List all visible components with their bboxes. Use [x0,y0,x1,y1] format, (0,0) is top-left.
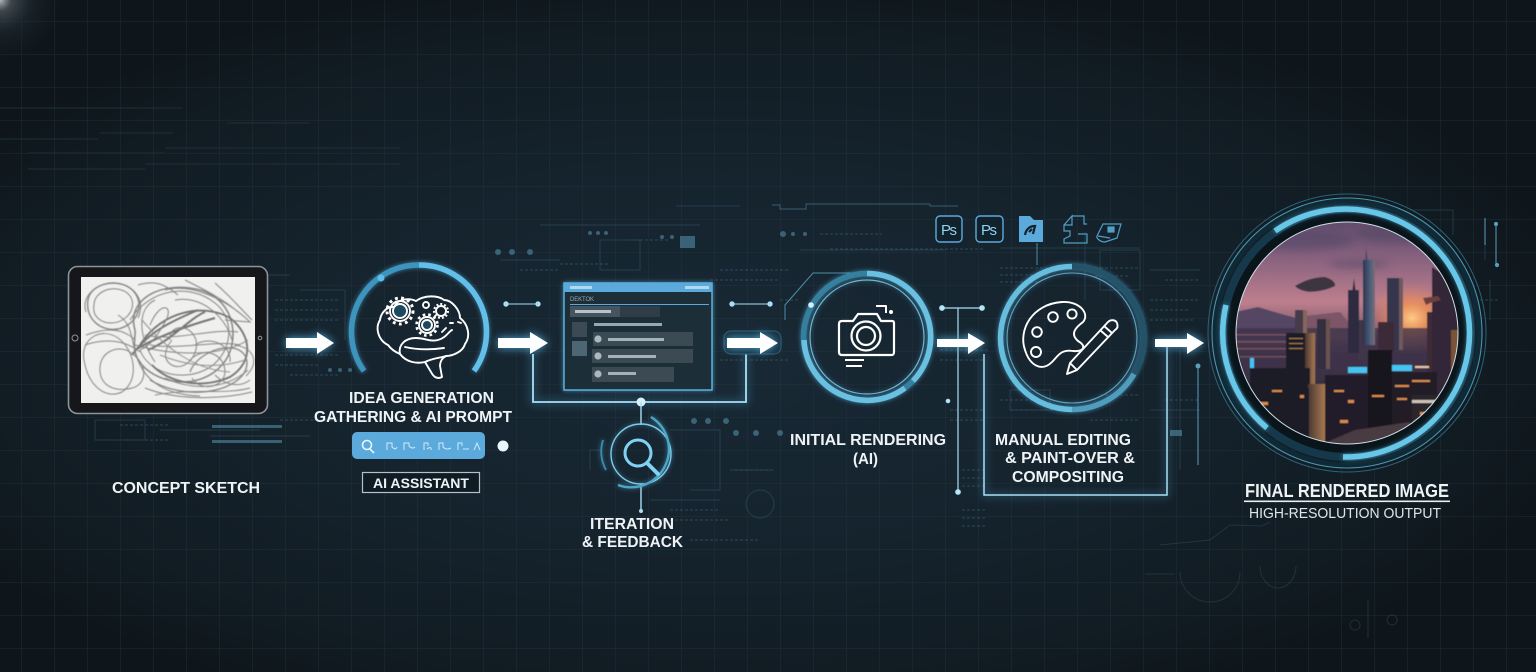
icon: document [1064,216,1087,243]
label: manual editing: MANUAL EDITING [995,432,1131,449]
panel: final rendered image [1208,194,1486,472]
progress ring [351,265,487,371]
label: idea generation [314,390,512,426]
icon: Ps second: Ps [981,222,997,239]
city lights [1236,334,1286,358]
label: manual editing: COMPOSITING [1012,469,1124,486]
label: iteration and feedback: & FEEDBACK [582,534,683,551]
editing frame connector [984,347,1167,495]
label: idea generation: IDEA GENERATION [349,390,494,407]
arrow: sketch to idea [286,332,334,354]
icon: search [362,440,374,453]
label: manual editing: & PAINT-OVER & [1005,450,1135,467]
loop node [636,398,646,406]
ring node [378,274,384,282]
ring node [808,302,814,308]
mountains [1236,306,1296,333]
label: manual editing [995,432,1135,486]
arrow: rendering to editing [937,333,985,354]
icon: Ps second [976,216,1003,242]
AI assistant tag [362,472,480,492]
window content [570,297,709,382]
label: iteration and feedback [582,516,683,551]
label: idea generation: GATHERING & AI PROMPT [314,409,512,426]
tablet body [68,266,268,414]
tablet side button [258,336,262,340]
label: final rendered image: FINAL RENDERED IMAGE [1245,481,1449,501]
city haze [1236,328,1428,354]
AI assistant tag: AI ASSISTANT [373,475,469,491]
image: futuristic city at sunset [1235,221,1460,448]
arrow: idea to interface [498,332,548,354]
icon: Ps [936,216,962,242]
faint circuit background details [95,204,1500,540]
window header [564,283,712,292]
label: final rendered image [1244,481,1450,522]
feedback loop connector [533,347,746,402]
icon: brain with gears [378,296,468,378]
icon: magnifier [625,440,658,474]
panel: iteration and feedback [601,398,671,513]
tablet camera [72,335,78,341]
outer rings [1208,194,1486,472]
panel: initial rendering [785,273,931,400]
panel: AI interface window [564,283,712,390]
AI prompt bar [352,432,485,459]
towers [1358,320,1364,339]
icon: Ps: Ps [941,222,957,239]
ring [601,417,671,487]
panel: concept sketch tablet [68,266,268,414]
tablet screen with pencil scribbles [81,277,255,403]
ring [804,273,931,400]
micro text rows [120,234,1500,540]
icon: tablet pen [1097,224,1121,242]
window content: DEKTOK [570,297,594,303]
neon signs [1250,358,1412,373]
label: concept sketch: CONCEPT SKETCH [112,480,260,497]
panel: idea generation [351,265,487,378]
icon: folder [1019,216,1043,242]
icon: palette and pencil [1023,302,1118,374]
flying ships [1295,277,1335,292]
prompt glyphs [387,443,480,450]
ring bright arcs [1223,209,1469,457]
icon: camera [839,306,894,366]
label: initial rendering: (AI) [853,451,878,468]
clouds [1274,228,1411,271]
node connectors [640,402,642,510]
small circuit accents right [1196,218,1499,465]
ring [1000,266,1144,410]
connector: tools to palette [1036,243,1038,265]
connector: rendering to editing [940,306,984,494]
circuit bracket [785,273,880,320]
label: final rendered image: HIGH-RESOLUTION OUTPUT [1249,505,1441,522]
panel: manual editing [1000,266,1144,410]
label: iteration and feedback: ITERATION [590,516,674,533]
image edge [1236,222,1458,444]
label: initial rendering: INITIAL RENDERING [790,432,946,449]
icon row: editing tools [936,216,1121,243]
arrow: editing to final [1155,333,1204,354]
prompt bar dot [498,440,508,452]
window lights [1260,366,1432,423]
small connector nodes [504,302,772,306]
label: initial rendering [790,432,946,468]
arrow: interface to initial rendering [724,331,781,354]
